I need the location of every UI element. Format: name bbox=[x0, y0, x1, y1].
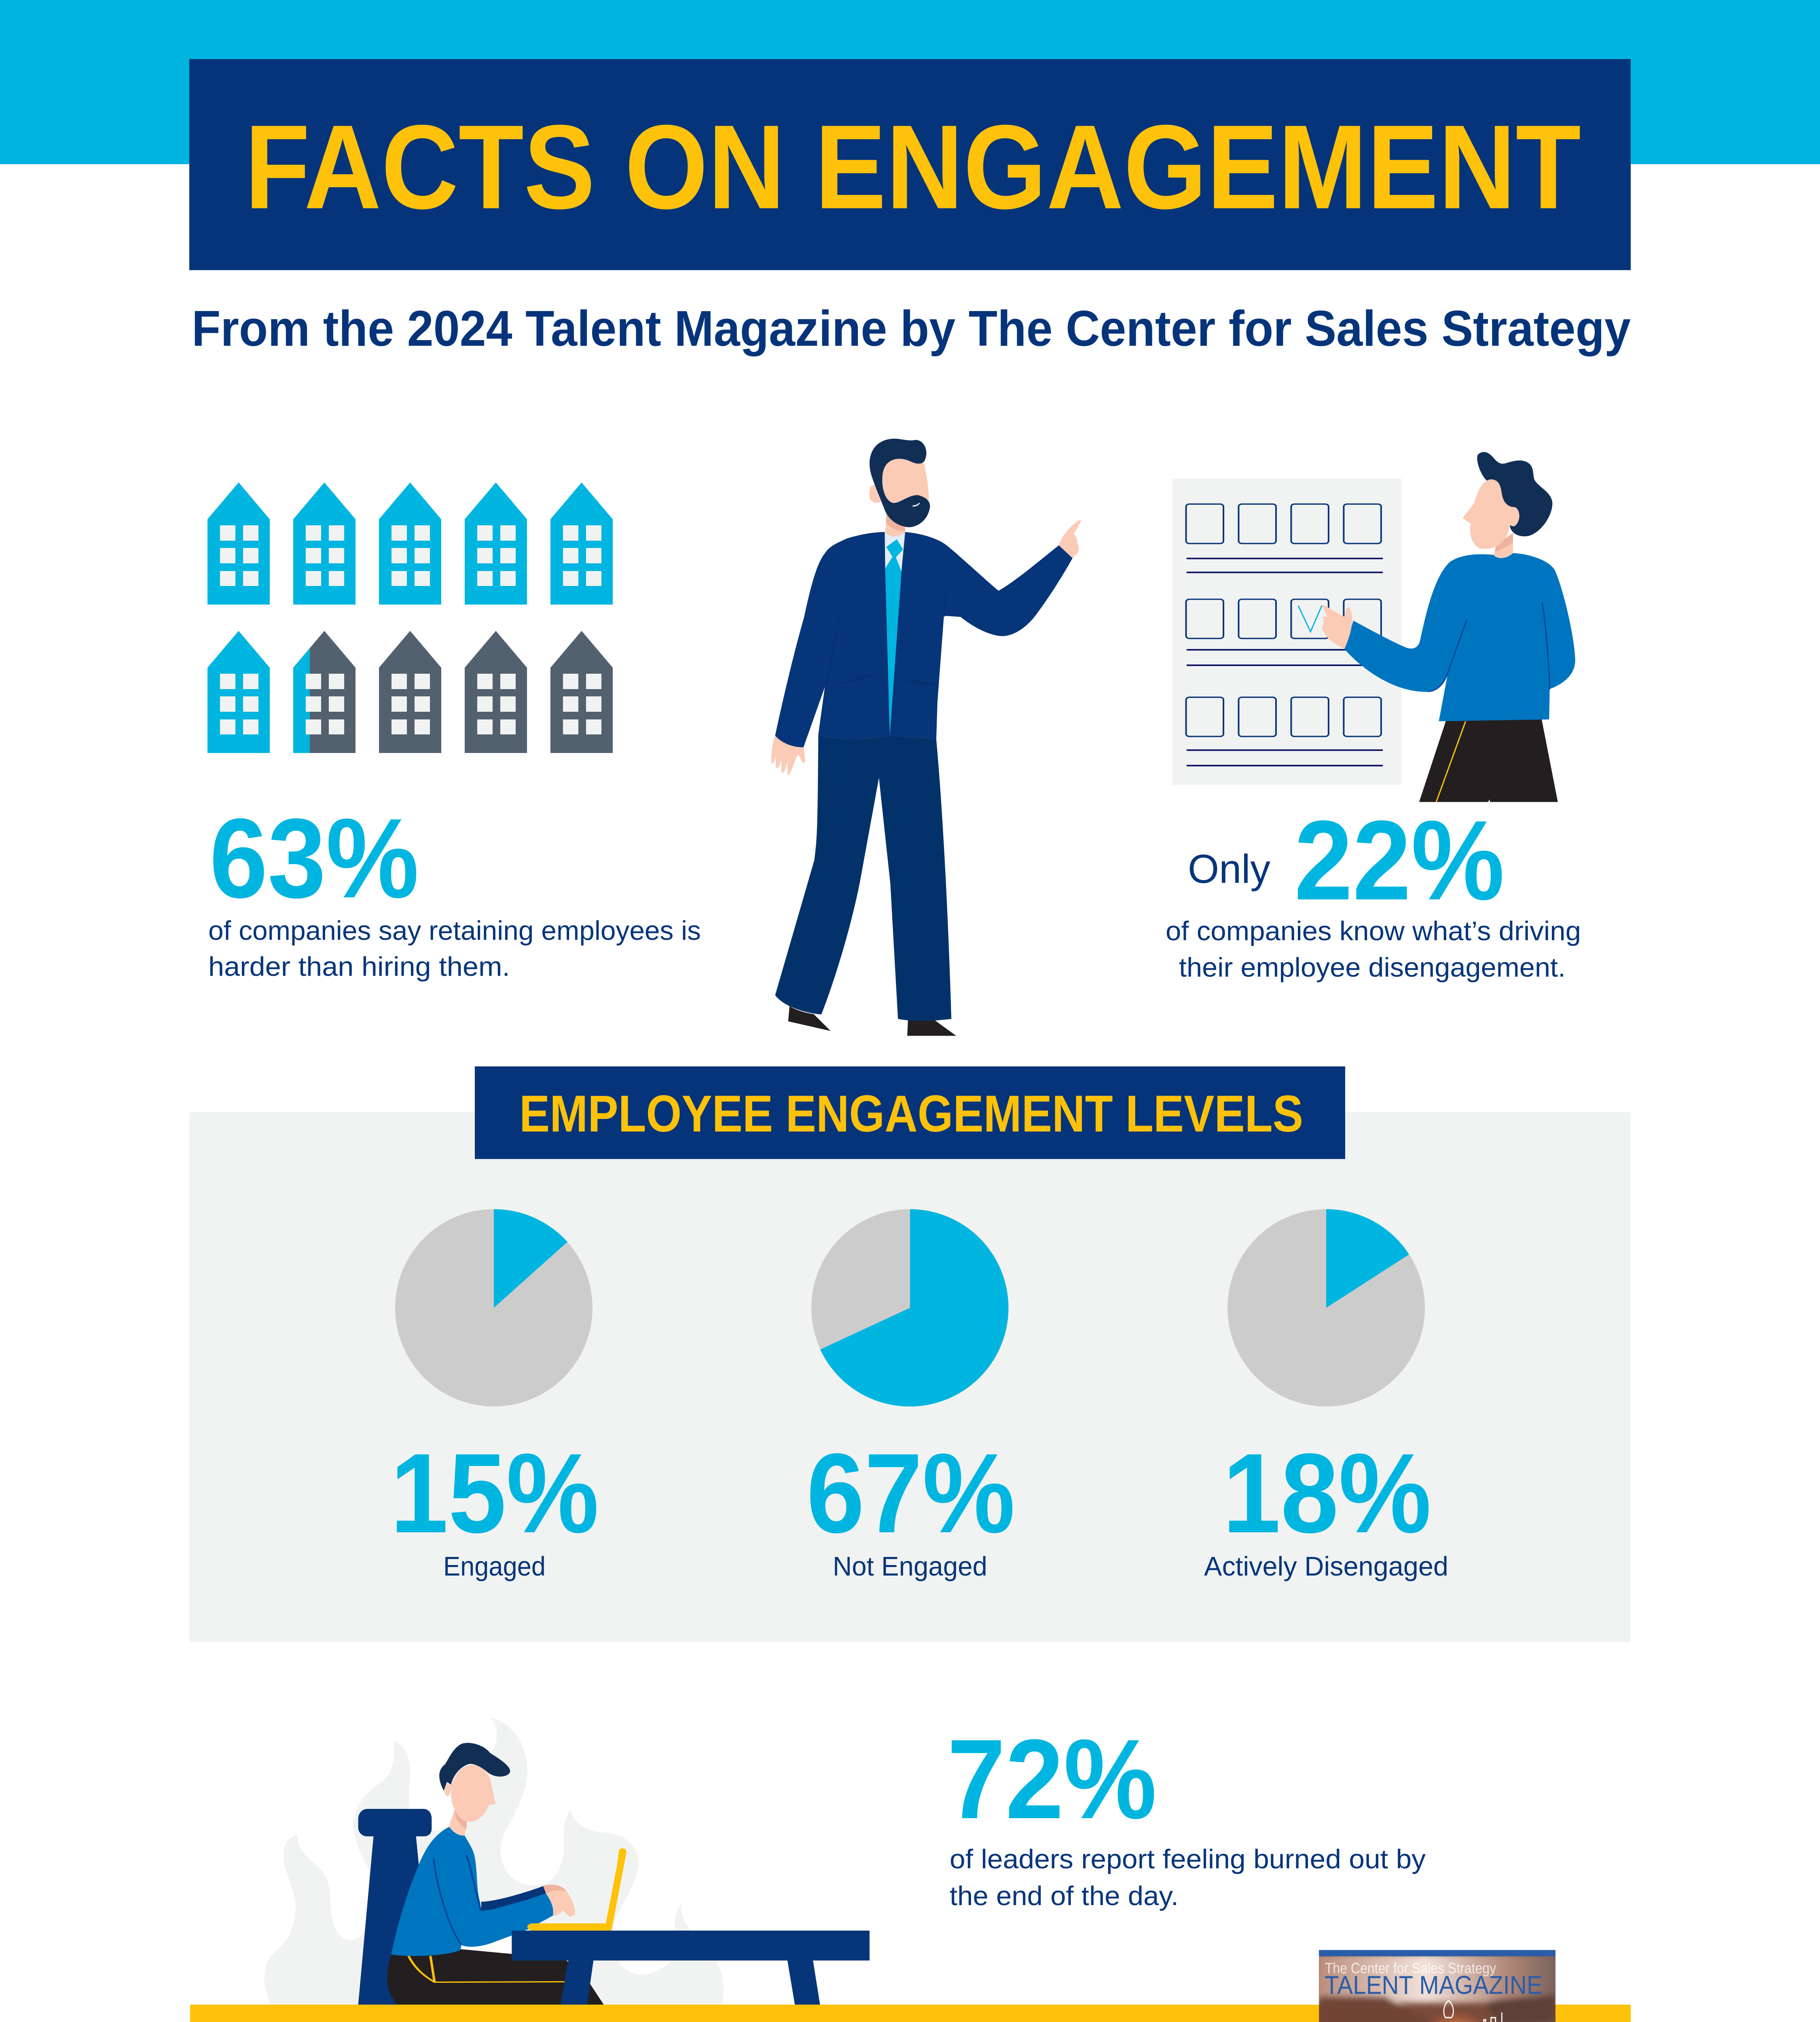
stat: 18% actively disengaged: 18% bbox=[1223, 1430, 1431, 1557]
panel: employee engagement levels bbox=[189, 1066, 1631, 1642]
stat: 63%: 63% bbox=[210, 795, 419, 922]
illustration: man in suit pointing bbox=[771, 439, 1081, 1036]
cover masthead: TALENT MAGAZINE bbox=[1325, 1971, 1543, 2000]
section heading: EMPLOYEE ENGAGEMENT LEVELS bbox=[519, 1085, 1303, 1143]
pie chart: engaged 15% bbox=[395, 1209, 593, 1407]
stat description: of leaders report feeling burned out by bbox=[950, 1844, 1426, 1874]
stat description: the end of the day. bbox=[950, 1881, 1179, 1911]
man figure bbox=[1322, 452, 1575, 802]
cover masthead bbox=[1325, 1962, 1542, 1994]
stat description: their employee disengagement. bbox=[1179, 952, 1566, 983]
stat description: of companies say retaining employees is bbox=[208, 916, 701, 946]
chair bbox=[358, 1809, 432, 2005]
checklist panel bbox=[1172, 478, 1401, 785]
laptop bbox=[527, 1849, 626, 1931]
call-to-action band bbox=[190, 2005, 1631, 2022]
stat description: of companies know what’s driving bbox=[1166, 916, 1581, 946]
panel: 72% burnout stat bbox=[947, 1716, 1426, 1911]
desk bbox=[512, 1931, 870, 2005]
subtitle: From the 2024 Talent Magazine by The Center for Sales Strategy bbox=[192, 301, 1631, 357]
icon: ten buildings, 63 percent filled bbox=[207, 482, 613, 753]
cover masthead: The Center for Sales Strategy bbox=[1325, 1960, 1496, 1977]
pie chart: actively disengaged 18% bbox=[1227, 1209, 1425, 1407]
cover photo bbox=[1316, 1950, 1558, 2022]
stat: 15% engaged: 15% bbox=[390, 1430, 599, 1557]
illustration: burned-out worker at laptop bbox=[264, 1718, 870, 2005]
stat: 15% engaged: Engaged bbox=[443, 1551, 546, 1582]
stat description bbox=[1166, 916, 1581, 983]
stat: 22%: 22% bbox=[1294, 797, 1505, 924]
top cyan band bbox=[0, 0, 1820, 164]
flames background bbox=[264, 1718, 724, 2005]
text: Only: Only bbox=[1188, 846, 1270, 892]
pie chart: not engaged 67% bbox=[811, 1209, 1009, 1407]
person at desk bbox=[387, 1743, 604, 2005]
stat description bbox=[950, 1844, 1426, 1911]
title: FACTS ON ENGAGEMENT bbox=[245, 100, 1581, 234]
stat description bbox=[208, 916, 701, 982]
panel: 22% disengagement stat bbox=[1166, 452, 1581, 983]
panel: 63% retention stat bbox=[207, 482, 701, 982]
section heading bbox=[475, 1066, 1345, 1159]
stat description: harder than hiring them. bbox=[208, 952, 510, 982]
cover top strip bbox=[1319, 1950, 1555, 1956]
magazine cover bbox=[1316, 1950, 1558, 2022]
title banner bbox=[189, 59, 1631, 270]
stat: 18% actively disengaged: Actively Disengaged bbox=[1204, 1551, 1448, 1582]
stat: 72%: 72% bbox=[947, 1716, 1157, 1842]
illustration: man ticking a checklist bbox=[1172, 452, 1575, 802]
stat: 67% not engaged: 67% bbox=[806, 1430, 1015, 1557]
stat: 67% not engaged: Not Engaged bbox=[833, 1551, 987, 1582]
